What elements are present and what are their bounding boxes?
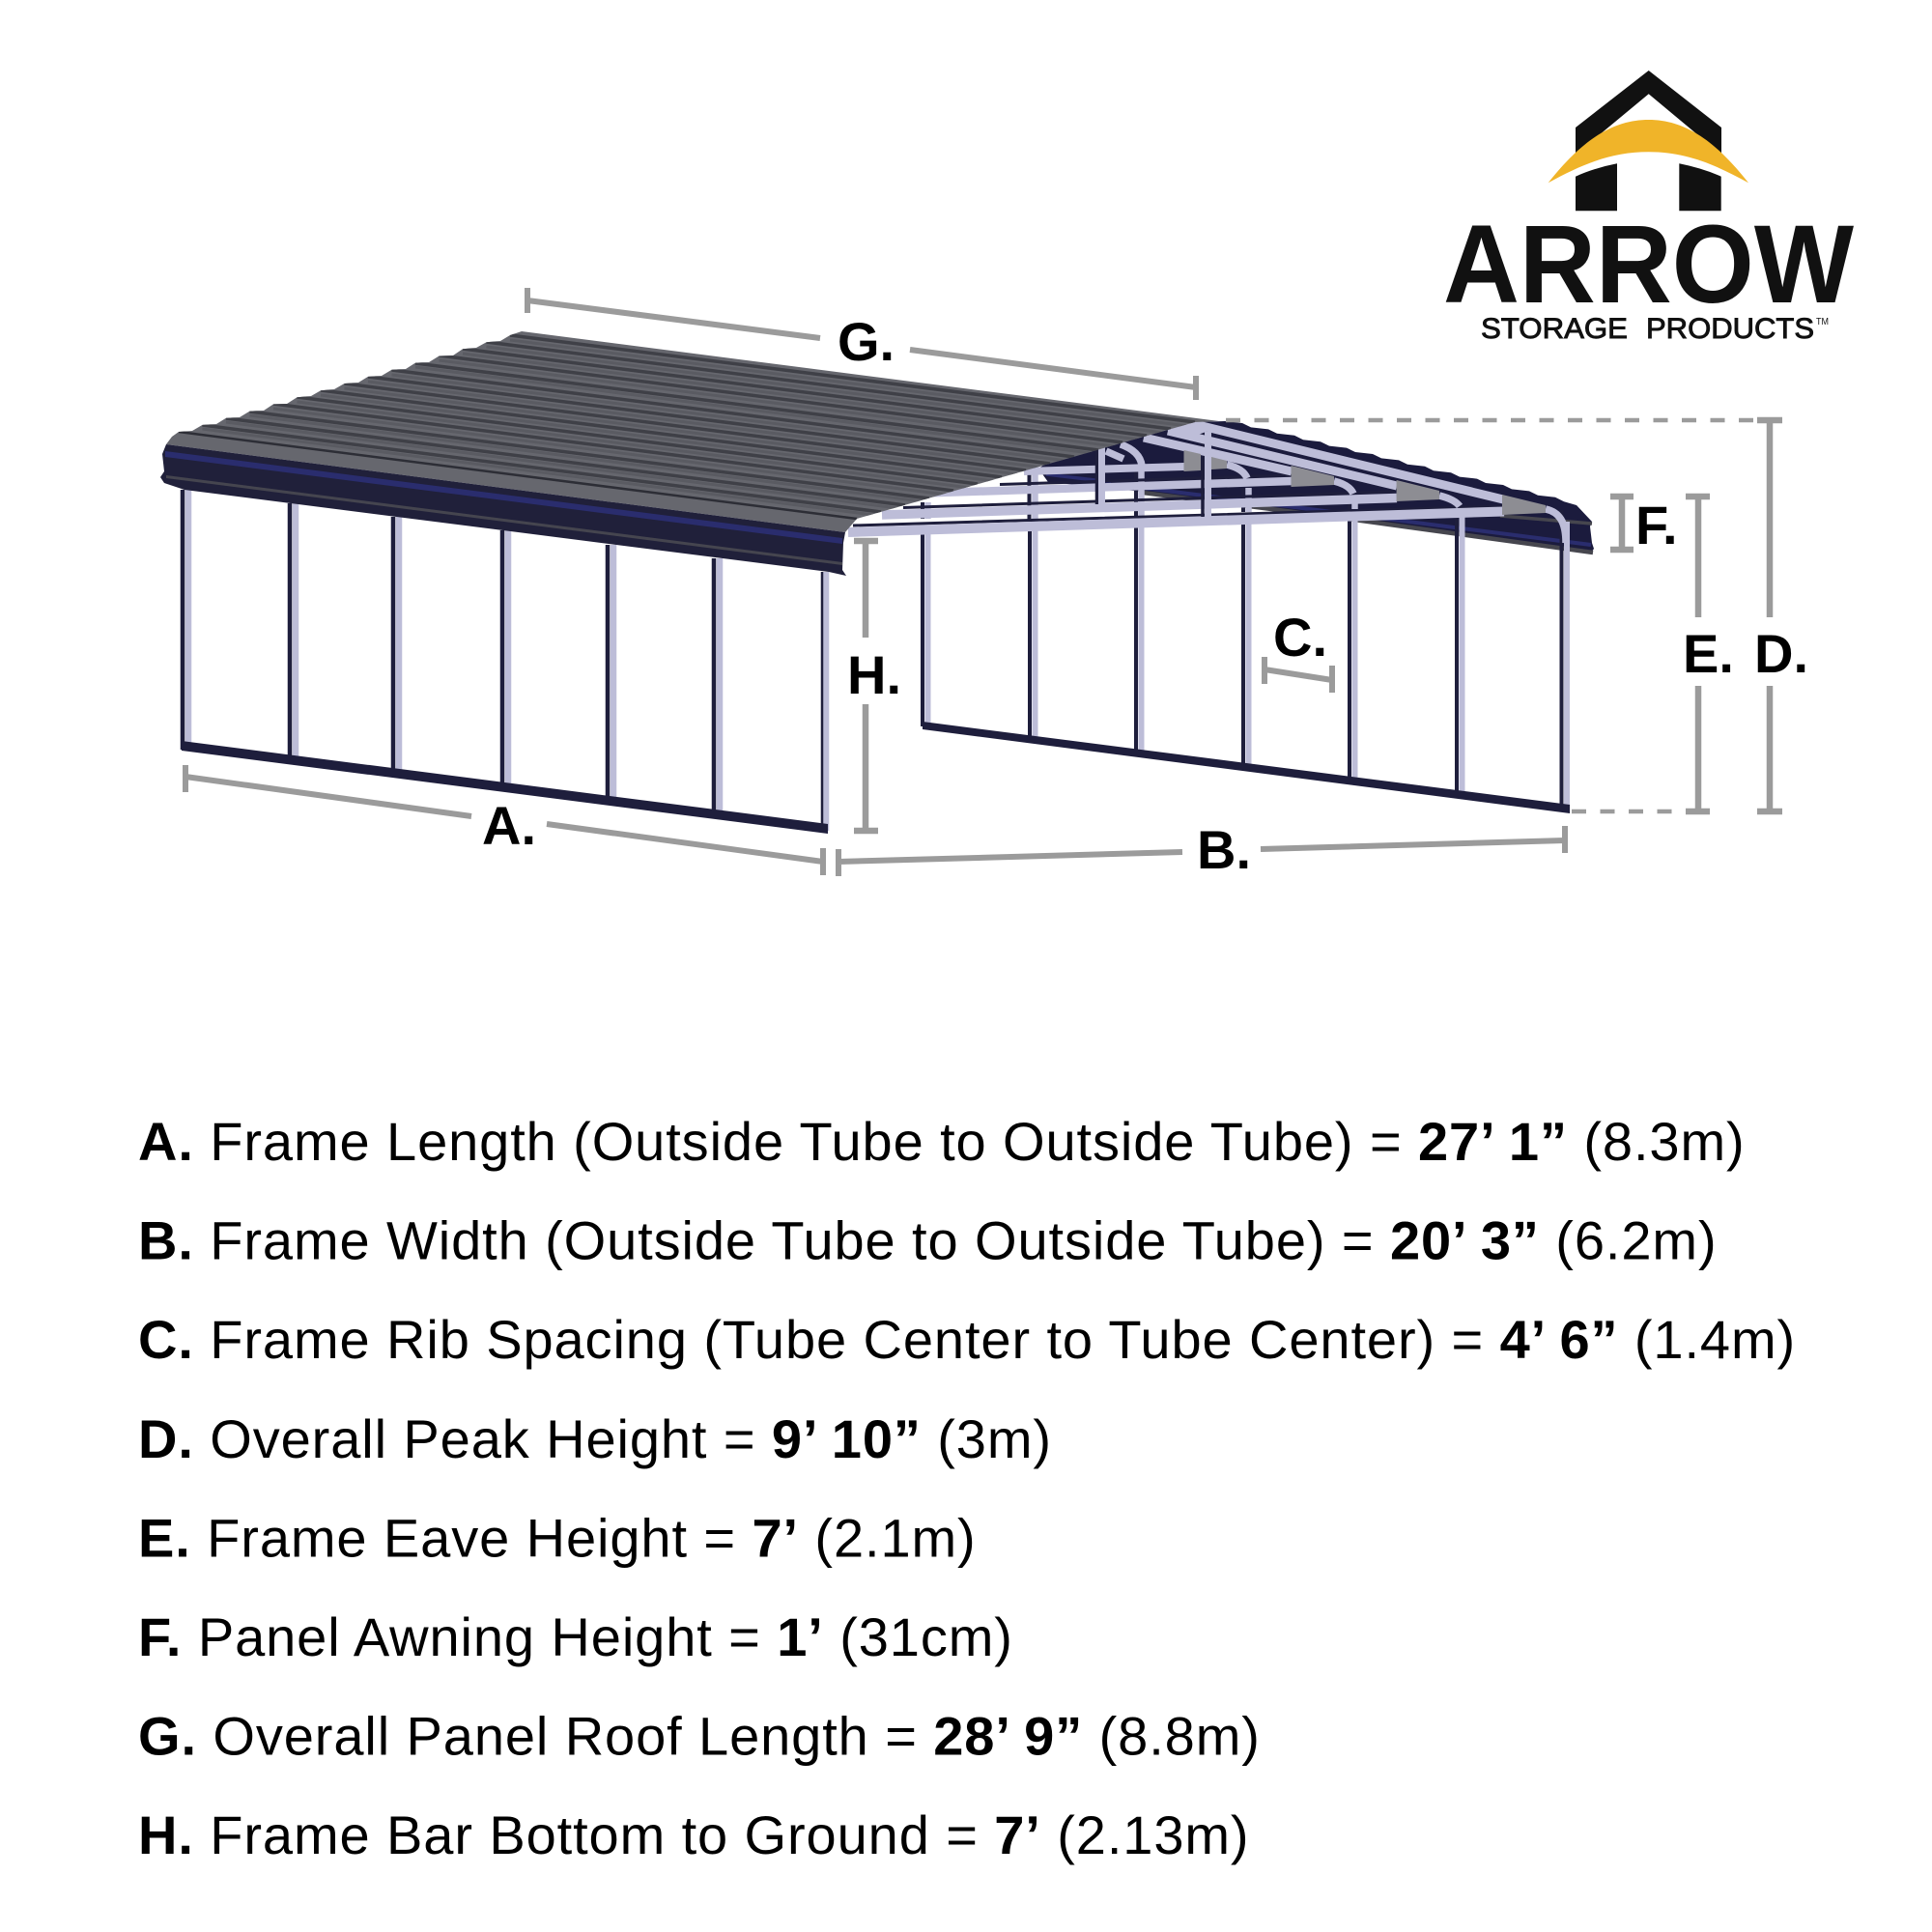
legend row H: H. Frame Bar Bottom to Ground = 7’ (2.13m): [138, 1804, 1249, 1865]
label A: A.: [482, 795, 536, 856]
icon: house left wall: [1576, 163, 1617, 211]
right side wall posts: [923, 510, 1570, 813]
base dashed guide: [1572, 810, 1686, 813]
peak height dashed guide: [1226, 418, 1757, 422]
legend row E: E. Frame Eave Height = 7’ (2.1m): [138, 1507, 977, 1568]
legend row D: D. Overall Peak Height = 9’ 10” (3m): [138, 1408, 1052, 1469]
logo wordmark: ARROW: [1443, 203, 1854, 327]
far-end roof underside: [1038, 421, 1594, 553]
logo tagline: PRODUCTS: [1646, 313, 1814, 345]
roof frame beams and trusses: [848, 421, 1566, 543]
blue trim stripe: [165, 451, 842, 544]
lower lip: [166, 475, 842, 565]
dimension E: [1686, 497, 1710, 811]
dimension H: [854, 541, 878, 831]
left bottom bar: [182, 741, 828, 834]
front fascia awning: [160, 444, 846, 576]
label G: G.: [838, 311, 895, 372]
label F: F.: [1635, 495, 1678, 555]
legend row B: B. Frame Width (Outside Tube to Outside Tube) = 20’ 3” (6.2m): [138, 1210, 1718, 1271]
legend row C: C. Frame Rib Spacing (Tube Center to Tube Center) = 4’ 6” (1.4m): [138, 1309, 1796, 1370]
legend row G: G. Overall Panel Roof Length = 28’ 9” (8.8m): [138, 1706, 1261, 1767]
label B: B.: [1197, 819, 1251, 880]
diagram letter labels: [482, 311, 1808, 880]
logo tagline: STORAGE: [1481, 313, 1628, 345]
legend row F: F. Panel Awning Height = 1’ (31cm): [138, 1606, 1013, 1667]
dimension F: [1610, 497, 1634, 550]
dimension B: [838, 826, 1565, 876]
dimension G: [527, 288, 1196, 400]
legend row A: A. Frame Length (Outside Tube to Outside Tube) = 27’ 1” (8.3m): [138, 1111, 1746, 1172]
corrugated roof panels: [166, 331, 1219, 532]
right bottom bar: [923, 722, 1570, 813]
label E: E.: [1683, 623, 1734, 684]
carport illustration: [160, 331, 1594, 834]
gray purlin brackets: [1184, 450, 1546, 515]
label C: C.: [1273, 607, 1327, 668]
icon: yellow arc: [1548, 120, 1748, 183]
logo: Arrow Storage Products: [1443, 71, 1854, 345]
label H: H.: [847, 644, 901, 705]
dimension D: [1757, 420, 1782, 811]
icon: house roof: [1576, 71, 1721, 155]
trademark: TM: [1816, 317, 1829, 327]
dimension C: [1264, 657, 1332, 693]
icon: house right wall: [1679, 163, 1721, 211]
left side wall posts: [182, 490, 828, 834]
label D: D.: [1754, 623, 1808, 684]
dimension lines: [185, 288, 1782, 876]
logo tagline: [1481, 313, 1814, 345]
dimensions legend list: [138, 1111, 1796, 1865]
dimension A: [185, 765, 823, 875]
